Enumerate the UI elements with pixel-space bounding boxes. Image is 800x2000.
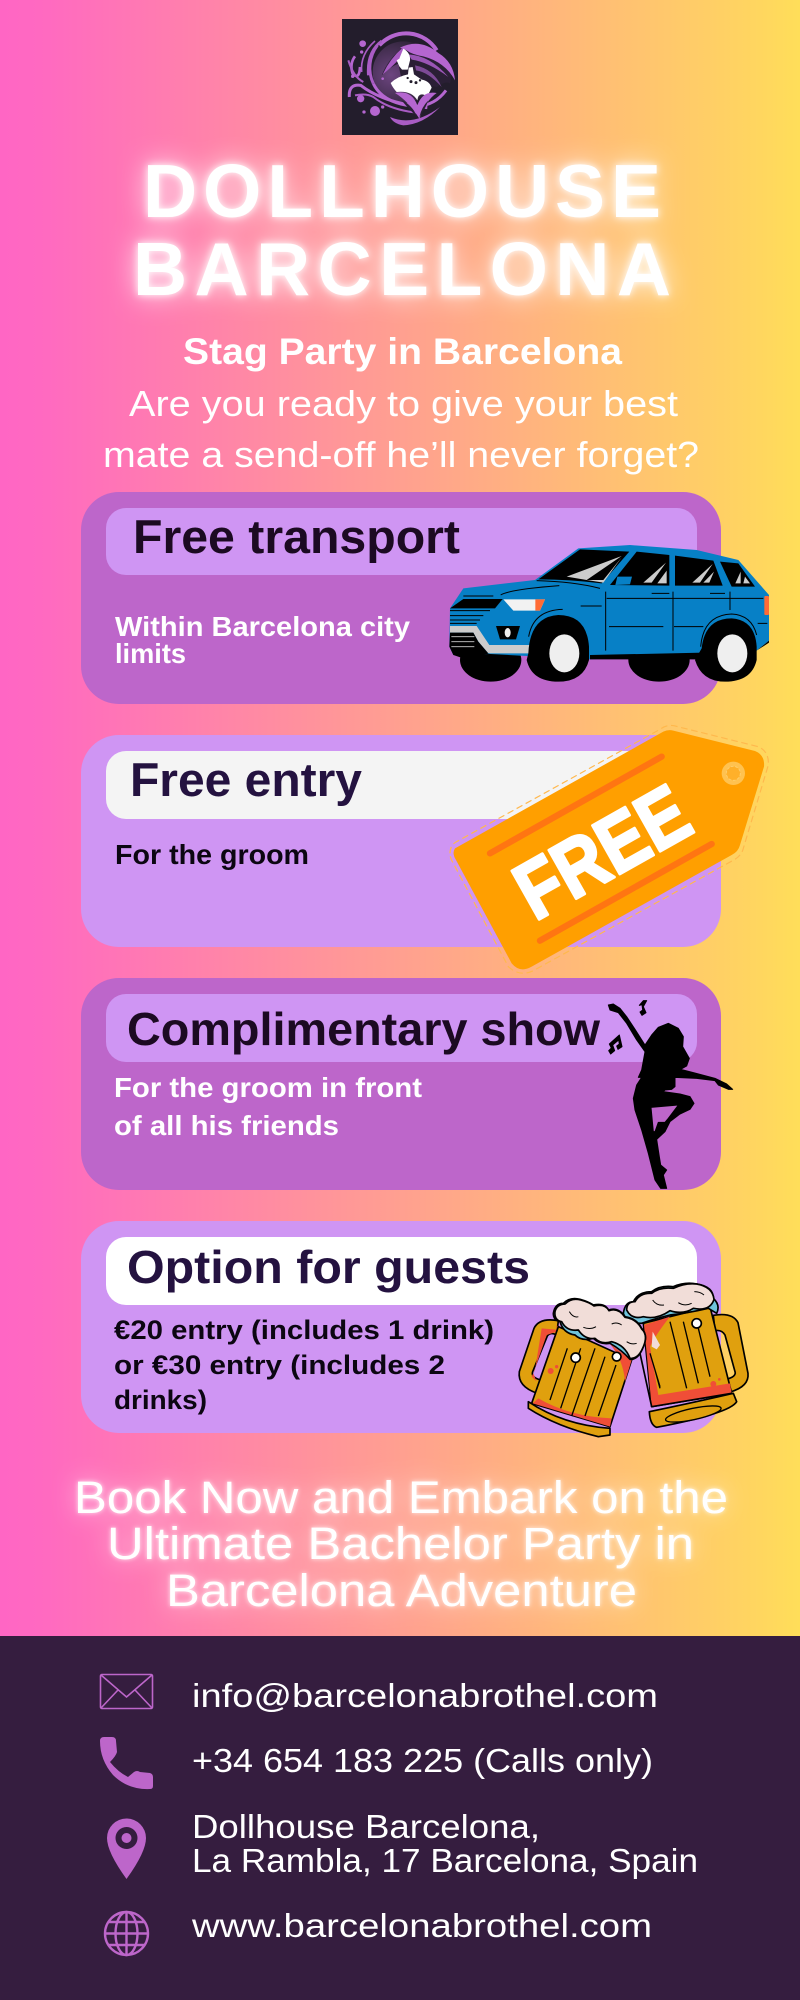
title: DOLLHOUSE <box>143 149 661 233</box>
panel: option for guests <box>81 1221 748 1437</box>
icon: blue car <box>449 545 769 682</box>
call to action: Book Now and Embark on the <box>74 1472 728 1523</box>
card background <box>81 735 721 947</box>
description: Within Barcelona city <box>115 611 410 642</box>
heading bar <box>106 994 697 1062</box>
icon: orange free tag: FREE <box>500 768 705 937</box>
intro line two: mate a send-off he’ll never forget? <box>103 434 699 475</box>
card background <box>81 1221 721 1433</box>
call to action: Barcelona Adventure <box>166 1565 637 1616</box>
description: or €30 entry (includes 2 <box>114 1350 445 1380</box>
heading: Complimentary show <box>127 1003 600 1055</box>
footer background <box>0 1636 800 2000</box>
heading: Option for guests <box>127 1241 530 1293</box>
card background <box>81 492 721 704</box>
panel: complimentary show <box>81 978 733 1190</box>
logo <box>342 19 458 135</box>
icon: location pin <box>107 1818 146 1879</box>
description: €20 entry (includes 1 drink) <box>114 1315 494 1345</box>
heading bar <box>106 751 697 819</box>
title <box>133 149 671 311</box>
description <box>114 1072 422 1141</box>
icon: beer mugs <box>519 1283 748 1437</box>
description: of all his friends <box>114 1110 339 1141</box>
description: drinks) <box>114 1385 207 1415</box>
icon: orange free tag <box>450 725 768 973</box>
call to action <box>74 1472 728 1616</box>
icon: globe <box>105 1912 148 1955</box>
icon: dancer silhouette <box>608 1001 733 1188</box>
description: For the groom <box>115 839 309 870</box>
address: Dollhouse Barcelona, <box>192 1808 540 1845</box>
address <box>192 1808 698 1879</box>
website: www.barcelonabrothel.com <box>191 1907 652 1944</box>
panel: free transport <box>81 492 769 704</box>
description: For the groom in front <box>114 1072 422 1103</box>
title: BARCELONA <box>133 227 671 311</box>
card background <box>81 978 721 1190</box>
description: limits <box>115 638 186 669</box>
heading bar <box>106 1237 697 1305</box>
description <box>115 611 410 669</box>
phone number: +34 654 183 225 (Calls only) <box>192 1742 653 1779</box>
call to action: Ultimate Bachelor Party in <box>107 1518 694 1569</box>
icon: phone <box>100 1737 153 1789</box>
heading: Free transport <box>133 510 460 563</box>
description <box>114 1315 494 1415</box>
intro line one: Are you ready to give your best <box>129 383 678 424</box>
icon: envelope <box>100 1674 152 1708</box>
panel: contact details <box>0 1636 800 2000</box>
heading bar <box>106 508 697 575</box>
subtitle <box>103 331 699 475</box>
email: info@barcelonabrothel.com <box>192 1677 658 1714</box>
heading: Free entry <box>130 753 362 806</box>
subtitle heading: Stag Party in Barcelona <box>183 331 622 372</box>
address: La Rambla, 17 Barcelona, Spain <box>192 1842 698 1879</box>
panel: free entry <box>81 725 768 973</box>
